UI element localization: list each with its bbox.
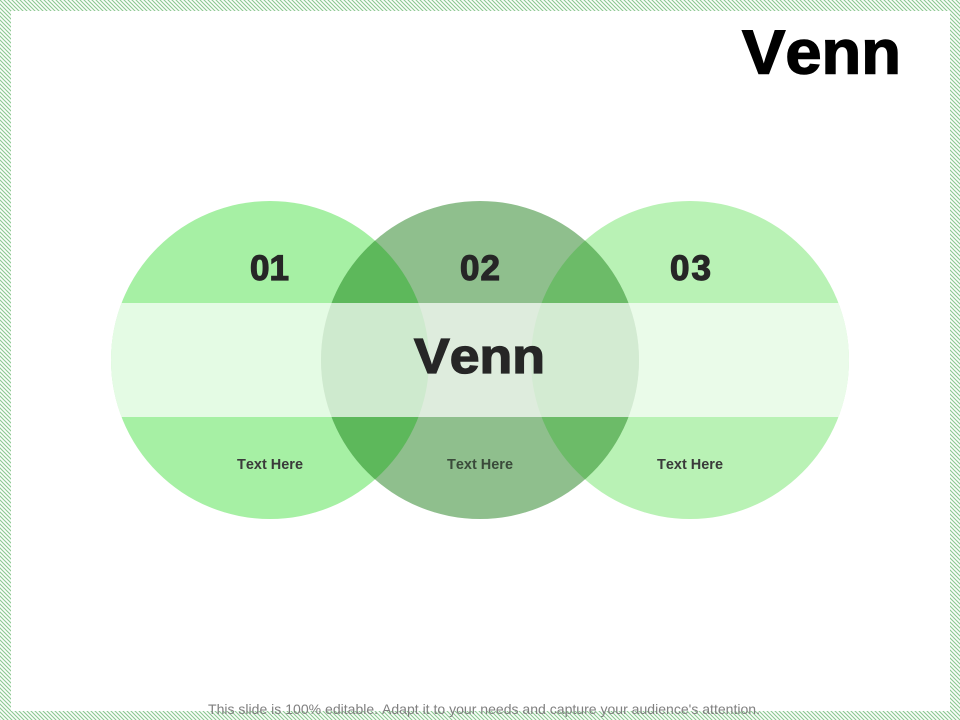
- text label 1: Text Here: [237, 457, 303, 473]
- center label: Venn: [414, 330, 545, 384]
- overlap left: [321, 240, 429, 480]
- number 02: 02: [460, 249, 500, 288]
- circle 2: [321, 201, 639, 519]
- text label 2: Text Here: [447, 457, 513, 473]
- title: Venn: [742, 18, 901, 88]
- overlap right: [531, 240, 639, 480]
- number 01: 01: [250, 249, 289, 288]
- number 03: 03: [670, 249, 711, 288]
- circle 1: [111, 201, 429, 519]
- circle 3: [531, 201, 849, 519]
- text label 3: Text Here: [657, 457, 723, 473]
- venn diagram: [100, 201, 860, 519]
- central band: [100, 303, 860, 417]
- footer note: This slide is 100% editable. Adapt it to your needs and capture your audience's attention.: [208, 701, 760, 717]
